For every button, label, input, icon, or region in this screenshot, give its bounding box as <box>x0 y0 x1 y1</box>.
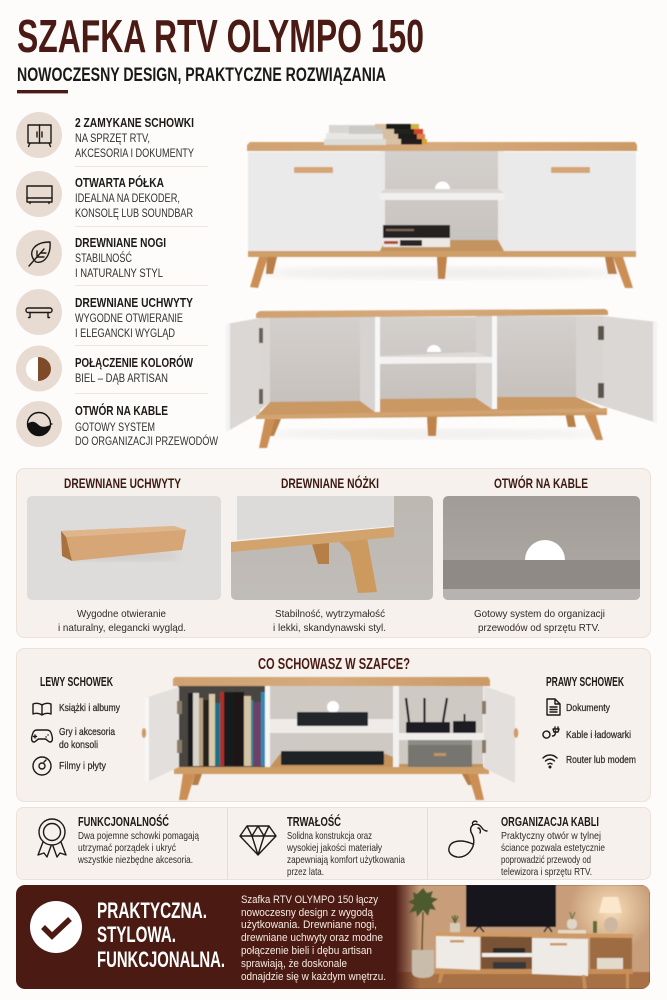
benefit: cable organization: poprowadzić przewody od <box>501 854 591 866</box>
detail: wooden legs <box>231 474 433 634</box>
banner lifestyle photo <box>396 885 650 989</box>
feature: otwór na kable <box>16 401 218 448</box>
detail: wooden handle: i naturalny, elegancki wygląd. <box>58 622 186 634</box>
feature: otwór na kable: OTWÓR NA KABLE <box>75 403 168 418</box>
panel: what you can store <box>16 648 650 802</box>
feature: drewniane uchwyty <box>16 289 193 340</box>
feature: 2 zamykane schowki: NA SPRZĘT RTV, <box>75 133 150 145</box>
right compartment list: Dokumenty <box>566 702 611 714</box>
title: SZAFKA RTV OLYMPO 150 <box>17 10 424 62</box>
benefit: functionality: utrzymać porządek i ukryć <box>78 842 176 854</box>
feature: drewniane uchwyty: I ELEGANCKI WYGLĄD <box>75 328 175 340</box>
benefit: cable organization <box>449 814 605 878</box>
detail: wooden handle: DREWNIANE UCHWYTY <box>64 475 181 491</box>
product: open cabinet view <box>226 309 657 448</box>
feature: otwarta półka: KONSOLĘ LUB SOUNDBAR <box>75 208 193 220</box>
slogan <box>97 902 224 967</box>
cabinet floor <box>256 397 607 419</box>
feature list <box>16 112 218 448</box>
right compartment list: Kable i ładowarki <box>566 729 631 741</box>
benefit: durability <box>240 814 405 878</box>
banner paragraph <box>241 894 386 983</box>
slogan: PRAKTYCZNA. <box>97 898 207 923</box>
panel: detail photos <box>16 468 650 638</box>
benefit: durability: TRWAŁOŚĆ <box>287 814 341 829</box>
panel: benefits <box>16 808 650 880</box>
icon: wifi <box>543 755 557 768</box>
right compartment list <box>543 674 636 768</box>
feature: drewniane nogi: DREWNIANE NOGI <box>75 235 166 250</box>
benefit: functionality: wszystkie niezbędne akcesoria. <box>77 854 193 866</box>
icon: gamepad <box>32 730 52 742</box>
detail: wooden legs: i lekki, skandynawski styl. <box>273 622 386 634</box>
left compartment list: LEWY SCHOWEK <box>40 674 113 689</box>
feature: połączenie kolorów: BIEL – DĄB ARTISAN <box>75 373 168 385</box>
books <box>188 692 265 766</box>
feature: połączenie kolorów <box>16 346 194 392</box>
benefit: durability: Solidna konstrukcja oraz <box>287 830 372 842</box>
right compartment list: Router lub modem <box>566 754 636 766</box>
detail: wooden handle: Wygodne otwieranie <box>77 608 166 620</box>
left compartment list: Książki i albumy <box>59 702 121 714</box>
icon: book <box>33 703 51 715</box>
feature: 2 zamykane schowki: AKCESORIA I DOKUMENTY <box>75 148 194 160</box>
banner paragraph: Szafka RTV OLYMPO 150 łączy <box>241 894 378 906</box>
title underline <box>17 90 68 93</box>
feature: otwór na kable: GOTOWY SYSTEM <box>75 422 155 434</box>
banner paragraph: sprawiają, że doskonale <box>241 958 347 970</box>
benefit: functionality: FUNKCJONALNOŚĆ <box>78 814 169 829</box>
left compartment list: Gry i akcesoria <box>59 726 115 738</box>
cabinet with contents <box>142 677 518 800</box>
icon: document <box>547 699 560 715</box>
left compartment list: Filmy i płyty <box>59 760 107 772</box>
banner paragraph: odnajdzie się w każdym wnętrzu. <box>241 971 386 983</box>
left compartment list: do konsoli <box>59 739 98 751</box>
books on lower shelf <box>383 225 450 247</box>
detail: cable opening: przewodów od sprzętu RTV. <box>478 622 600 634</box>
benefit: cable organization: ściance pozwala estetycznie <box>501 842 605 854</box>
icon: check badge <box>30 901 82 953</box>
feature: otwarta półka: IDEALNA NA DEKODER, <box>75 193 180 205</box>
books on top <box>324 124 427 145</box>
detail: wooden legs: Stabilność, wytrzymałość <box>275 608 385 620</box>
router and box <box>399 698 483 768</box>
benefit: cable organization: ORGANIZACJA KABLI <box>501 814 599 829</box>
benefit: functionality: Dwa pojemne schowki pomagają <box>78 830 199 842</box>
left compartment list <box>32 674 121 775</box>
feature: połączenie kolorów: POŁĄCZENIE KOLORÓW <box>75 355 194 370</box>
slogan: STYLOWA. <box>97 922 176 947</box>
detail: wooden legs: DREWNIANE NÓŻKI <box>281 474 379 491</box>
benefit: durability: przez lata. <box>287 866 324 878</box>
feature: drewniane nogi <box>16 230 166 280</box>
right compartment list: PRAWY SCHOWEK <box>546 674 624 689</box>
media devices <box>270 701 393 767</box>
panel heading: CO SCHOWASZ W SZAFCE? <box>258 656 410 673</box>
benefit: durability: wysokiej jakości materiały <box>286 842 383 854</box>
benefit: functionality <box>38 814 199 866</box>
feature: otwarta półka <box>16 171 193 220</box>
feature: drewniane uchwyty: DREWNIANE UCHWYTY <box>75 295 193 310</box>
feature: otwór na kable: DO ORGANIZACJI PRZEWODÓW <box>75 435 218 448</box>
banner: summary <box>16 885 650 989</box>
benefit: cable organization: Praktyczny otwór w tylnej <box>501 830 601 842</box>
detail: wooden handle <box>27 475 221 634</box>
left door <box>226 318 263 432</box>
feature: 2 zamykane schowki: 2 ZAMYKANE SCHOWKI <box>75 115 194 130</box>
banner paragraph: użytkowania. Drewniane nogi, <box>241 919 377 931</box>
feature: drewniane uchwyty: WYGODNE OTWIERANIE <box>75 313 183 325</box>
banner paragraph: połączenie bieli i dębu artisan <box>241 945 372 957</box>
detail: cable opening <box>443 474 640 634</box>
subtitle: NOWOCZESNY DESIGN, PRAKTYCZNE ROZWIĄZANIA <box>17 65 386 86</box>
benefit: durability: zapewniają komfort użytkowania <box>287 854 405 866</box>
detail: cable opening: Gotowy system do organizacji <box>474 608 605 620</box>
banner paragraph: drewniane uchwyty oraz modne <box>241 932 383 944</box>
slogan: FUNKCJONALNA. <box>97 947 225 972</box>
icon: cable plug <box>543 727 559 738</box>
feature: otwarta półka: OTWARTA PÓŁKA <box>75 175 164 190</box>
icon: disc <box>33 757 51 775</box>
feature: drewniane nogi: I NATURALNY STYL <box>75 268 163 280</box>
benefit: cable organization: telewizora i sprzętu RTV. <box>501 866 592 878</box>
detail: cable opening: OTWÓR NA KABLE <box>494 474 588 491</box>
product: closed cabinet front view <box>247 124 637 288</box>
feature: 2 zamykane schowki <box>16 112 194 160</box>
right door <box>598 316 657 423</box>
feature: drewniane nogi: STABILNOŚĆ <box>75 252 132 265</box>
banner paragraph: nowoczesny design z wygodą <box>241 907 374 919</box>
